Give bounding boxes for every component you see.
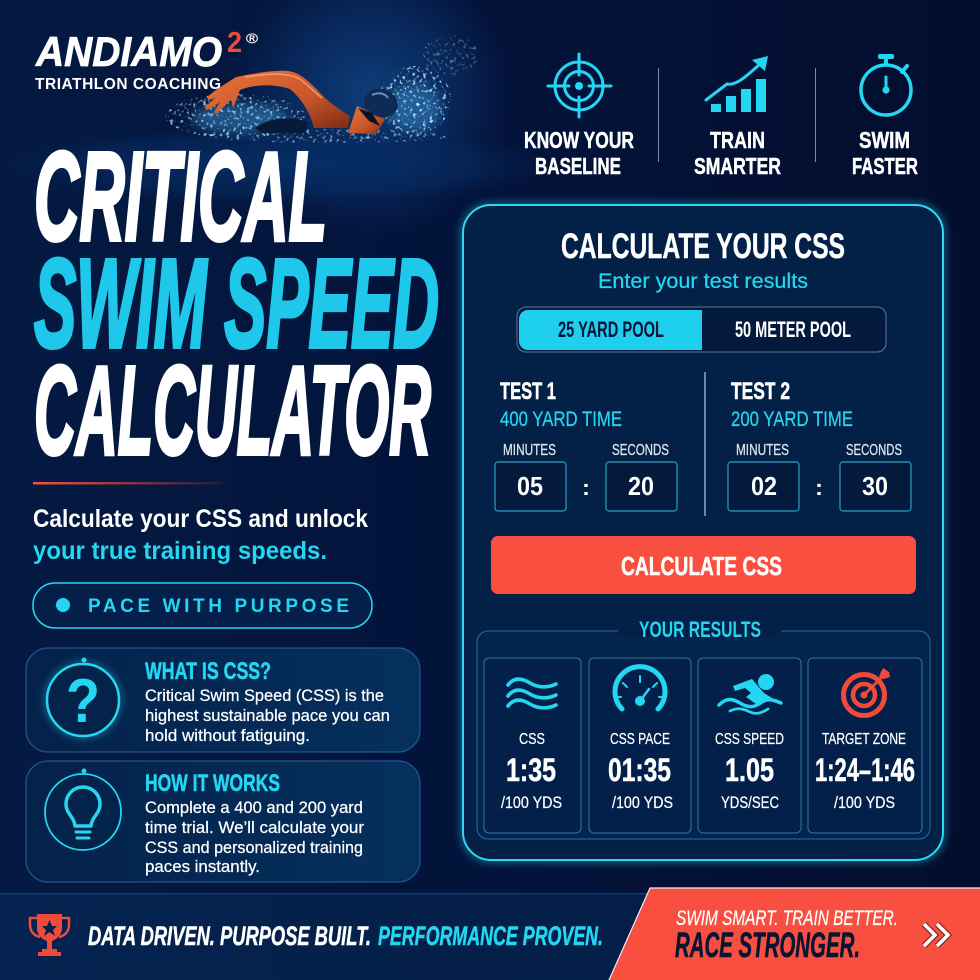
subtitle: Calculate your CSS and unlock bbox=[33, 505, 368, 533]
result card: target zone: TARGET ZONE bbox=[822, 731, 906, 748]
swimmer photo bbox=[165, 35, 478, 143]
panel: calculator card bbox=[463, 205, 943, 860]
result card: css pace: /100 YDS bbox=[612, 793, 673, 812]
heading: HOW IT WORKS bbox=[145, 770, 280, 797]
body text: CSS and personalized training bbox=[145, 839, 363, 857]
tagline: TRIATHLON COACHING bbox=[35, 76, 221, 93]
water splash bbox=[165, 35, 478, 143]
cap highlight bbox=[372, 93, 388, 98]
results section bbox=[477, 617, 930, 839]
result card: css speed bbox=[698, 658, 801, 833]
pool toggle: 25 YARD POOL bbox=[558, 317, 664, 342]
body text: Critical Swim Speed (CSS) is the bbox=[145, 687, 384, 705]
label: know your baseline: KNOW YOUR bbox=[524, 127, 634, 153]
icon: chevrons bbox=[924, 924, 948, 946]
benefit icons row bbox=[524, 54, 918, 179]
test 1 inputs: 20 bbox=[628, 471, 654, 501]
subtitle bbox=[33, 505, 368, 565]
slogan: PERFORMANCE PROVEN. bbox=[378, 921, 603, 951]
body text: hold without fatiguing. bbox=[145, 727, 310, 745]
panel: red call to action bbox=[609, 888, 980, 980]
pill: pace with purpose: PACE WITH PURPOSE bbox=[88, 596, 349, 617]
title bbox=[34, 126, 439, 481]
result card: css: CSS bbox=[519, 731, 545, 748]
text: CALCULATOR bbox=[34, 340, 431, 481]
body text: time trial. We’ll calculate your bbox=[145, 819, 365, 837]
logo bbox=[35, 27, 259, 93]
subtitle: your true training speeds. bbox=[33, 537, 327, 565]
result card: css pace: CSS PACE bbox=[610, 731, 670, 748]
brand name: ANDIAMO bbox=[35, 28, 222, 75]
dark swimsuit bbox=[255, 118, 308, 133]
test 1 inputs: : bbox=[582, 475, 590, 500]
icon: trophy bbox=[30, 914, 69, 956]
body text bbox=[145, 687, 390, 745]
test 2 inputs bbox=[728, 378, 911, 511]
test 2 inputs: 200 YARD TIME bbox=[731, 408, 853, 431]
label: swim faster: FASTER bbox=[852, 153, 918, 179]
test 1 inputs: SECONDS bbox=[612, 442, 669, 459]
label: know your baseline bbox=[524, 127, 634, 179]
body text: Complete a 400 and 200 yard bbox=[145, 799, 363, 817]
icon: swimmer bbox=[719, 674, 781, 713]
icon: target bbox=[548, 54, 611, 117]
heading: WHAT IS CSS? bbox=[145, 658, 271, 685]
goggles bbox=[358, 108, 380, 126]
test 2 inputs: 02 bbox=[751, 471, 777, 501]
result card: css speed: CSS SPEED bbox=[715, 731, 784, 748]
result card: css: /100 YDS bbox=[501, 793, 562, 812]
icon: waves bbox=[508, 679, 556, 708]
registered mark: ® bbox=[246, 30, 259, 46]
superscript 2: 2 bbox=[227, 27, 242, 59]
test 1 inputs bbox=[495, 378, 677, 511]
test 1 inputs: 400 YARD TIME bbox=[500, 408, 622, 431]
splash highlight bbox=[192, 84, 441, 133]
swimmer face bbox=[348, 106, 385, 134]
results heading: YOUR RESULTS bbox=[639, 617, 761, 642]
result card: css: 1:35 bbox=[506, 752, 556, 788]
test 1 inputs: MINUTES bbox=[503, 442, 556, 459]
icon: question mark: ? bbox=[66, 667, 100, 736]
icon: gauge bbox=[615, 667, 665, 709]
card heading: CALCULATE YOUR CSS bbox=[561, 227, 845, 266]
test 2 inputs: TEST 2 bbox=[731, 378, 790, 405]
test 2 inputs: SECONDS bbox=[846, 442, 902, 459]
cta line 1: SWIM SMART. TRAIN BETTER. bbox=[676, 907, 898, 930]
test 2 inputs: : bbox=[815, 475, 823, 500]
footer bar bbox=[0, 888, 980, 980]
panel: what is css bbox=[26, 648, 420, 752]
test 1 inputs: 05 bbox=[517, 471, 543, 501]
label: know your baseline: BASELINE bbox=[535, 153, 621, 179]
result card: css speed: YDS/SEC bbox=[721, 793, 779, 812]
swim cap bbox=[360, 84, 402, 122]
label: train smarter: TRAIN bbox=[710, 127, 765, 153]
calculate button: CALCULATE CSS bbox=[621, 551, 782, 581]
result card: target zone: /100 YDS bbox=[834, 793, 895, 812]
result card: target zone: 1:24–1:46 bbox=[815, 752, 915, 788]
swimmer arm and torso bbox=[205, 71, 350, 128]
pool toggle: 50 METER POOL bbox=[735, 317, 851, 342]
label: train smarter bbox=[694, 127, 781, 179]
test 2 inputs: MINUTES bbox=[736, 442, 789, 459]
body text bbox=[145, 799, 365, 876]
body text: highest sustainable pace you can bbox=[145, 707, 390, 725]
icon: stopwatch bbox=[861, 54, 911, 115]
label: train smarter: SMARTER bbox=[694, 153, 781, 179]
result card: css speed: 1.05 bbox=[725, 752, 774, 788]
label: swim faster: SWIM bbox=[859, 127, 910, 153]
body text: paces instantly. bbox=[145, 858, 260, 876]
icon: question mark bbox=[47, 658, 119, 736]
title: CRITICAL bbox=[34, 126, 327, 267]
icon: red target bbox=[844, 668, 890, 716]
result card: css pace bbox=[589, 658, 691, 833]
test 1 inputs: TEST 1 bbox=[500, 378, 556, 405]
calculate button bbox=[491, 536, 916, 594]
slogan: DATA DRIVEN. PURPOSE BUILT. bbox=[88, 921, 371, 951]
label: swim faster bbox=[852, 127, 918, 179]
test 2 inputs: 30 bbox=[862, 471, 888, 501]
panel: how it works bbox=[26, 761, 420, 882]
icon: growth chart bbox=[706, 56, 768, 112]
result card: target zone bbox=[808, 658, 922, 833]
card subheading: Enter your test results bbox=[598, 270, 808, 293]
pill: pace with purpose bbox=[33, 583, 372, 628]
icon: light bulb bbox=[45, 768, 121, 850]
result card: css pace: 01:35 bbox=[608, 752, 671, 788]
pool toggle bbox=[517, 307, 886, 352]
title line: swim speed: SWIM SPEED bbox=[34, 233, 439, 374]
arm highlight bbox=[245, 74, 322, 98]
result card: css bbox=[484, 658, 581, 833]
